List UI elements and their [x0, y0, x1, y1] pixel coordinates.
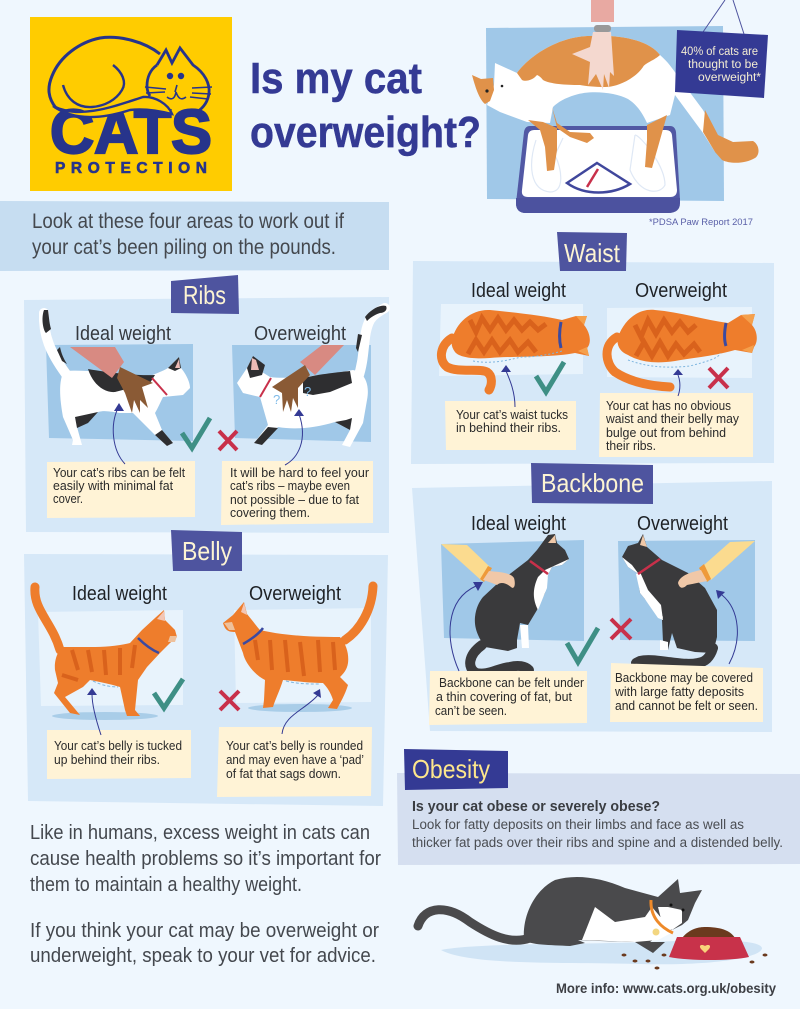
panel: obesity: [397, 749, 800, 865]
tail: [418, 910, 530, 940]
check mark: [154, 679, 183, 708]
illustration: cat on scales: [472, 0, 768, 213]
ideal weight: ribs: [43, 310, 193, 446]
text block: health advice: Like in humans, excess weight in cats can: [30, 822, 370, 844]
ideal weight: belly: Ideal weight: [72, 583, 167, 605]
panel: backbone: [412, 463, 772, 732]
callout: ribs overweight: cat’s ribs – maybe even: [230, 478, 350, 493]
check mark: [182, 418, 210, 448]
callout: belly overweight: and may even have a ‘pad’: [226, 752, 364, 767]
callout: waist ideal: Your cat’s waist tucks: [456, 407, 568, 422]
callout: backbone ideal: [429, 671, 587, 725]
collar: [651, 900, 673, 933]
food bowl: [669, 927, 749, 960]
text block: health advice: cause health problems so it’s important for: [30, 848, 381, 870]
callout: ribs overweight: [221, 461, 373, 525]
text block: health advice: underweight, speak to your vet for advice.: [30, 945, 376, 967]
panel: ribs: [24, 275, 389, 533]
weighing scales: [516, 126, 680, 213]
check mark: [536, 362, 564, 392]
overweight: waist: [607, 280, 757, 387]
callout: waist overweight: [599, 393, 753, 457]
heading: obesity: [404, 749, 508, 790]
heading: ribs: [171, 275, 239, 314]
text block: health advice: If you think your cat may be overweight or: [30, 920, 379, 942]
logo: Cats Protection: PROTECTION: [55, 160, 207, 177]
text block: health advice: them to maintain a healthy weight.: [30, 874, 302, 896]
overweight: ribs: Overweight: [254, 323, 346, 345]
text: is your cat obese: thicker fat pads over their ribs and spine and a distended belly.: [412, 835, 783, 850]
overweight: belly: Overweight: [249, 583, 341, 605]
cross mark: [709, 368, 728, 388]
heading: belly: Belly: [182, 536, 232, 566]
intro band: [0, 201, 389, 271]
text: is your cat obese: Is your cat obese or severely obese?: [412, 799, 660, 815]
cross mark: [219, 431, 237, 450]
callout: waist overweight: waist and their belly may: [605, 411, 740, 426]
callout: belly overweight: [217, 727, 372, 797]
ideal weight: belly: [35, 583, 183, 720]
callout: backbone overweight: with large fatty deposits: [614, 684, 744, 699]
footnote: *PDSA Paw Report 2017: [649, 217, 753, 228]
callout: belly ideal: [47, 730, 191, 779]
callout: belly ideal: Your cat’s belly is tucked: [54, 738, 182, 753]
callout: waist ideal: in behind their ribs.: [456, 420, 561, 435]
spilled kibble: [622, 954, 768, 970]
callout: belly overweight: of fat that sags down.: [226, 766, 341, 781]
callout: 40% of cats: 40% of cats are: [681, 46, 758, 58]
intro band: Look at these four areas to work out if: [32, 210, 344, 233]
callout: belly overweight: Your cat’s belly is rounded: [226, 738, 363, 753]
heading: backbone: [531, 463, 653, 504]
overweight: ribs: [232, 306, 387, 447]
callout: ribs overweight: covering them.: [230, 505, 310, 520]
callout: 40% of cats: [675, 0, 768, 98]
overweight: backbone: [618, 513, 755, 664]
callout: backbone overweight: and cannot be felt or seen.: [615, 698, 758, 713]
cat body: [472, 36, 759, 171]
callout: ribs overweight: It will be hard to feel your: [230, 465, 370, 480]
panel: belly: [24, 530, 388, 806]
heading: backbone: Backbone: [541, 468, 644, 498]
overweight: waist: Overweight: [635, 280, 727, 302]
blue backdrop: [486, 26, 724, 201]
cross mark: [611, 619, 631, 639]
callout: ribs ideal: cover.: [53, 491, 83, 506]
callout: backbone overweight: [610, 663, 763, 722]
callout: waist ideal: [445, 401, 576, 450]
arrow: belly overweight: [282, 689, 321, 734]
callout: backbone ideal: can’t be seen.: [435, 703, 507, 718]
hand and sleeve: [572, 0, 614, 90]
logo: Cats Protection: [30, 17, 232, 191]
white chest and muzzle: [582, 907, 682, 942]
callout: waist overweight: bulge out from behind: [606, 425, 726, 440]
ideal weight: backbone: Ideal weight: [471, 513, 566, 535]
text: is your cat obese: [412, 799, 783, 850]
text: is your cat obese: Look for fatty deposits on their limbs and face as well as: [412, 817, 744, 832]
overweight: belly: [223, 583, 373, 712]
cat body: [524, 877, 702, 953]
arrow: backbone overweight: [716, 590, 737, 664]
illustration: obese cat eating: [418, 877, 768, 970]
arrow: waist overweight: [673, 369, 683, 396]
callout: ribs overweight: not possible – due to fat: [230, 492, 359, 507]
logo: Cats Protection: CATS: [50, 98, 212, 167]
arrow: ribs overweight: [285, 409, 304, 465]
callout: belly ideal: up behind their ribs.: [54, 752, 160, 767]
callout: ribs ideal: Your cat’s ribs can be felt: [53, 465, 185, 480]
title: Is my cat: [250, 54, 422, 103]
ideal weight: waist: Ideal weight: [471, 280, 566, 302]
heading: obesity: Obesity: [412, 754, 490, 784]
dashed belly lines: [93, 681, 320, 687]
heading: waist: Waist: [564, 238, 621, 268]
callout: 40% of cats: thought to be: [688, 59, 758, 71]
callout: backbone overweight: Backbone may be covered: [615, 670, 753, 685]
heading: waist: [557, 232, 627, 271]
intro band: your cat’s been piling on the pounds.: [32, 236, 336, 259]
arrow: backbone ideal: [450, 582, 483, 671]
title: [250, 54, 481, 157]
ideal weight: waist: [439, 280, 590, 390]
arrow: belly ideal: [87, 688, 101, 735]
check mark: [567, 628, 598, 662]
callout: backbone ideal: a thin covering of fat, but: [436, 689, 572, 704]
heading: belly: [171, 530, 242, 571]
ideal weight: backbone: [441, 513, 584, 674]
arrow: waist ideal: [501, 365, 515, 407]
text block: health advice: [30, 822, 381, 967]
callout: backbone ideal: Backbone can be felt under: [439, 675, 585, 690]
overweight: ribs: ?: [273, 392, 280, 407]
callout: ribs ideal: [47, 461, 195, 518]
cross mark: [220, 691, 239, 710]
ideal weight: ribs: Ideal weight: [75, 323, 171, 345]
more info link: More info: www.cats.org.uk/obesity: [556, 980, 776, 996]
arrow: ribs ideal: [113, 403, 125, 464]
callout: ribs ideal: easily with minimal fat: [53, 478, 173, 493]
callout: waist overweight: Your cat has no obvious: [606, 398, 731, 413]
panel: waist: [411, 232, 774, 464]
floor shadow: [441, 940, 762, 964]
overweight: ribs: ?: [304, 384, 311, 399]
title: overweight?: [250, 108, 481, 157]
overweight: backbone: Overweight: [637, 513, 728, 535]
callout: 40% of cats: overweight*: [698, 72, 762, 84]
callout: waist overweight: their ribs.: [606, 438, 656, 453]
heading: ribs: Ribs: [183, 280, 226, 310]
